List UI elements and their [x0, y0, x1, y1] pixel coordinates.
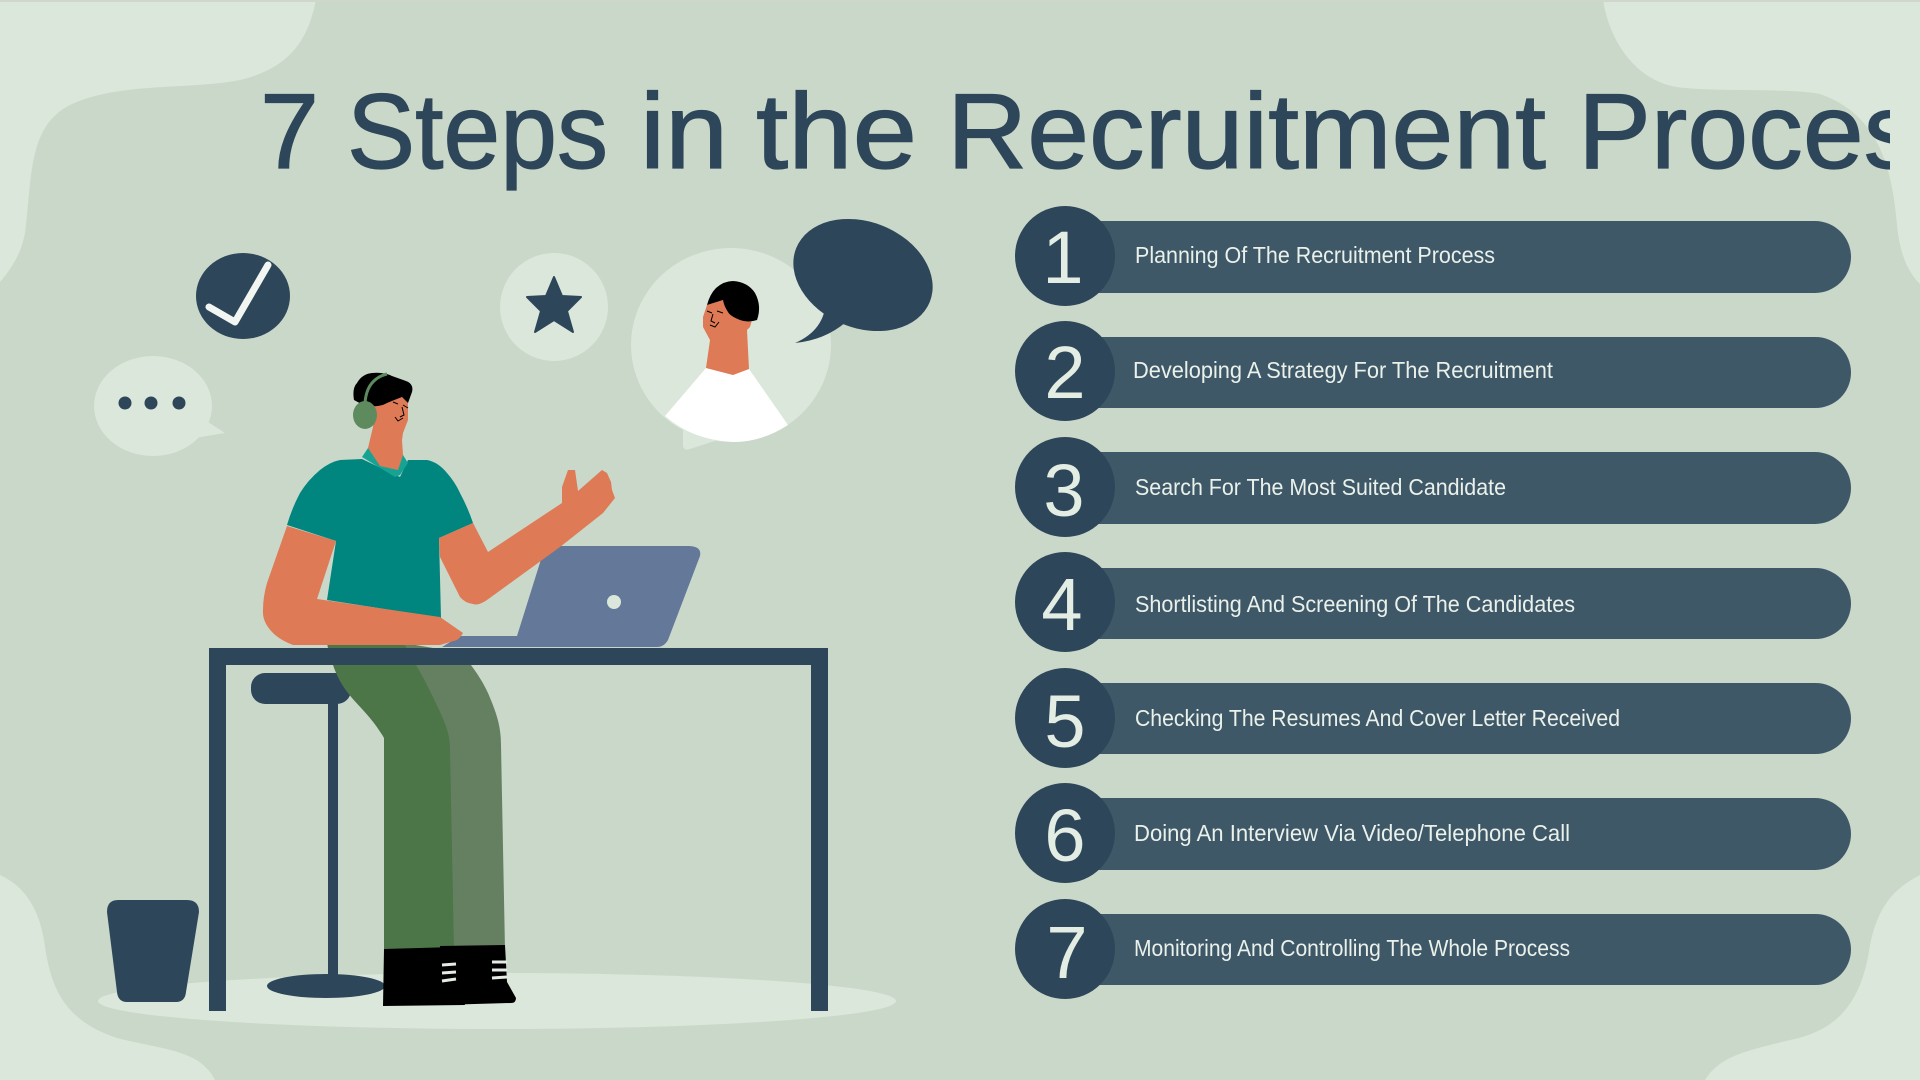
step 7: Monitoring And Controlling The Whole Process — [1134, 935, 1570, 961]
candidate hair — [707, 281, 759, 322]
step 7: 7 — [1046, 911, 1088, 994]
step 4: Shortlisting And Screening Of The Candidates — [1135, 591, 1575, 617]
waste bin — [107, 900, 199, 1002]
step 5 — [1015, 668, 1851, 768]
title: in — [640, 71, 728, 191]
table — [209, 648, 828, 1011]
face details — [393, 402, 408, 421]
step 3: 3 — [1043, 449, 1085, 532]
floor ellipse — [98, 973, 896, 1029]
step 2: 2 — [1044, 331, 1086, 414]
collar — [362, 448, 408, 477]
title: Recruitment — [947, 71, 1546, 191]
title: 7 — [260, 71, 319, 191]
step 1: 1 — [1042, 216, 1084, 299]
title — [264, 90, 1890, 191]
step 2: Developing A Strategy For The Recruitment — [1133, 357, 1554, 383]
torso — [287, 459, 473, 618]
typing speech bubble — [94, 356, 225, 456]
step 3: Search For The Most Suited Candidate — [1135, 474, 1506, 500]
hair — [353, 373, 412, 406]
laptop — [442, 546, 700, 647]
check icon — [196, 253, 290, 339]
title: Steps — [347, 71, 608, 191]
star icon — [500, 253, 608, 361]
step 6: Doing An Interview Via Video/Telephone Call — [1134, 820, 1570, 846]
step 6 — [1015, 783, 1851, 883]
step 1 — [1015, 206, 1851, 306]
arm left — [263, 526, 463, 645]
candidate video bubble — [631, 248, 831, 450]
step 4 — [1015, 552, 1851, 652]
illustration: person at desk — [98, 373, 896, 1029]
step 5: 5 — [1044, 680, 1086, 763]
arm right — [439, 470, 615, 604]
step 7 — [1015, 899, 1851, 999]
candidate neck and face — [703, 300, 752, 375]
candidate shirt — [665, 368, 788, 442]
step 3 — [1015, 437, 1851, 537]
step 1: Planning Of The Recruitment Process — [1135, 242, 1495, 268]
headphones — [353, 374, 387, 429]
shoes — [383, 945, 516, 1006]
trousers — [327, 643, 505, 950]
step 4: 4 — [1041, 563, 1083, 646]
step 5: Checking The Resumes And Cover Letter Received — [1135, 705, 1620, 731]
candidate smile — [707, 311, 723, 327]
step 6: 6 — [1044, 794, 1086, 877]
stool — [251, 673, 385, 998]
step 2 — [1015, 321, 1851, 421]
dark speech bubble — [776, 199, 950, 351]
title: the — [756, 71, 917, 191]
neck and face — [368, 397, 408, 470]
